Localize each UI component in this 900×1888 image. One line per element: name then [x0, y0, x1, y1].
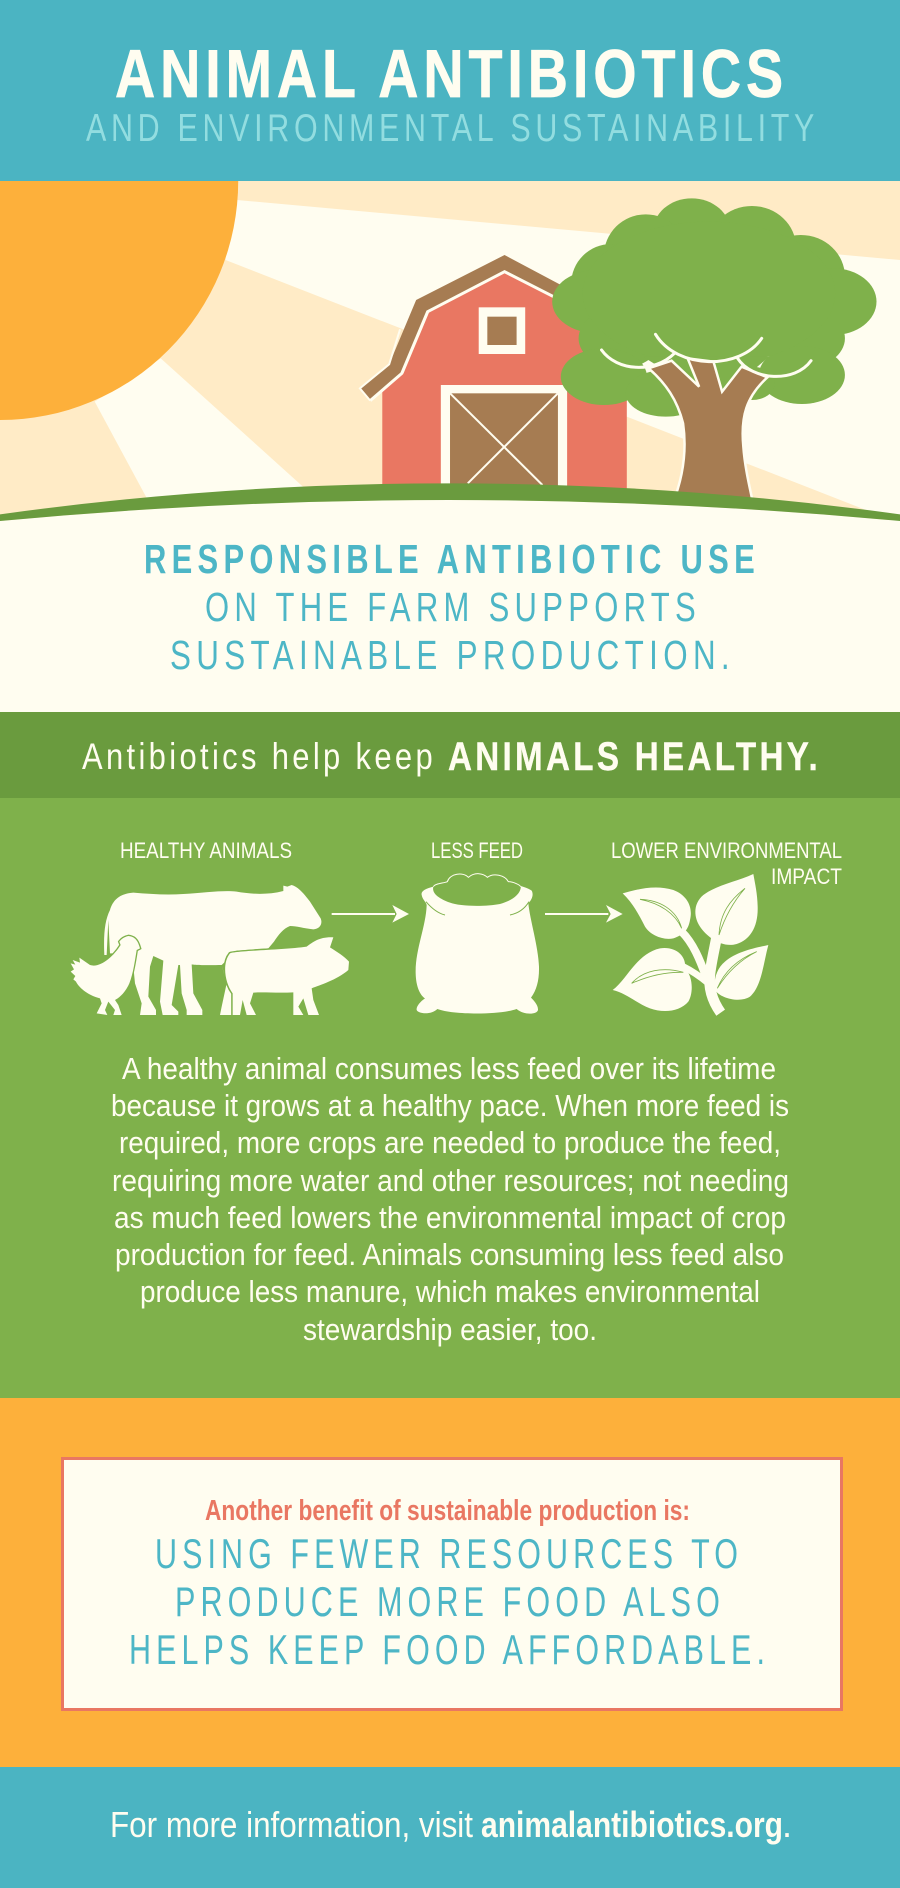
callout lead-in: Another benefit of sustainable production is:: [205, 1495, 690, 1527]
icon: leafy plant: [613, 874, 768, 1013]
icon: feed sack: [416, 874, 539, 1014]
panel: responsible use statement: [0, 526, 900, 712]
panel: responsible use statement: ON THE FARM SUPPORTS: [205, 584, 701, 630]
panel: header: [0, 0, 900, 181]
body text: A healthy animal consumes less feed over its lifetime: [122, 1051, 776, 1086]
panel: animals healthy banner: ANIMALS HEALTHY.: [448, 735, 821, 779]
icon: cow, chicken and pig: [71, 885, 349, 1015]
panel: footer: .: [782, 1804, 792, 1845]
green hill: [0, 483, 900, 521]
sun rays: [95, 199, 900, 523]
panel: animals healthy banner: [0, 712, 900, 798]
label: lower environmental impact: LOWER ENVIRONMENTAL: [611, 838, 842, 863]
panel: responsible use statement: SUSTAINABLE PRODUCTION.: [170, 632, 735, 678]
panel: footer: animalantibiotics.org: [481, 1804, 783, 1845]
body text: as much feed lowers the environmental impact of crop: [114, 1200, 786, 1235]
callout statement: [129, 1530, 770, 1673]
panel: footer: [0, 1767, 900, 1888]
icon: barn: [360, 255, 627, 497]
chicken: [71, 936, 140, 1015]
body text: production for feed. Animals consuming less feed also: [115, 1237, 784, 1272]
panel: farm illustration: [0, 0, 900, 543]
arrow: animals to feed: [332, 905, 409, 923]
body text: stewardship easier, too.: [303, 1312, 597, 1347]
icon: sun: [0, 0, 238, 420]
body text: required, more crops are needed to produce the feed,: [119, 1125, 781, 1160]
arrow: feed to impact: [545, 905, 623, 923]
panel: animals healthy banner: Antibiotics help keep: [82, 736, 436, 777]
body text: [111, 1051, 789, 1347]
body text: produce less manure, which makes environmental: [140, 1274, 760, 1309]
cream ground: [0, 500, 900, 543]
panel: footer: For more information, visit: [110, 1804, 473, 1845]
label: less feed: LESS FEED: [431, 838, 523, 863]
label: healthy animals: HEALTHY ANIMALS: [120, 838, 292, 863]
callout box: [62, 1458, 842, 1710]
body text: requiring more water and other resources; not needing: [112, 1163, 789, 1198]
body text: because it grows at a healthy pace. When more feed is: [111, 1088, 789, 1123]
icon: tree: [552, 198, 876, 503]
label: lower environmental impact: IMPACT: [771, 864, 842, 889]
pig: [225, 937, 349, 1015]
panel: green benefits section: [0, 798, 900, 1398]
panel: orange section: [0, 1398, 900, 1768]
label: lower environmental impact: [611, 838, 842, 889]
